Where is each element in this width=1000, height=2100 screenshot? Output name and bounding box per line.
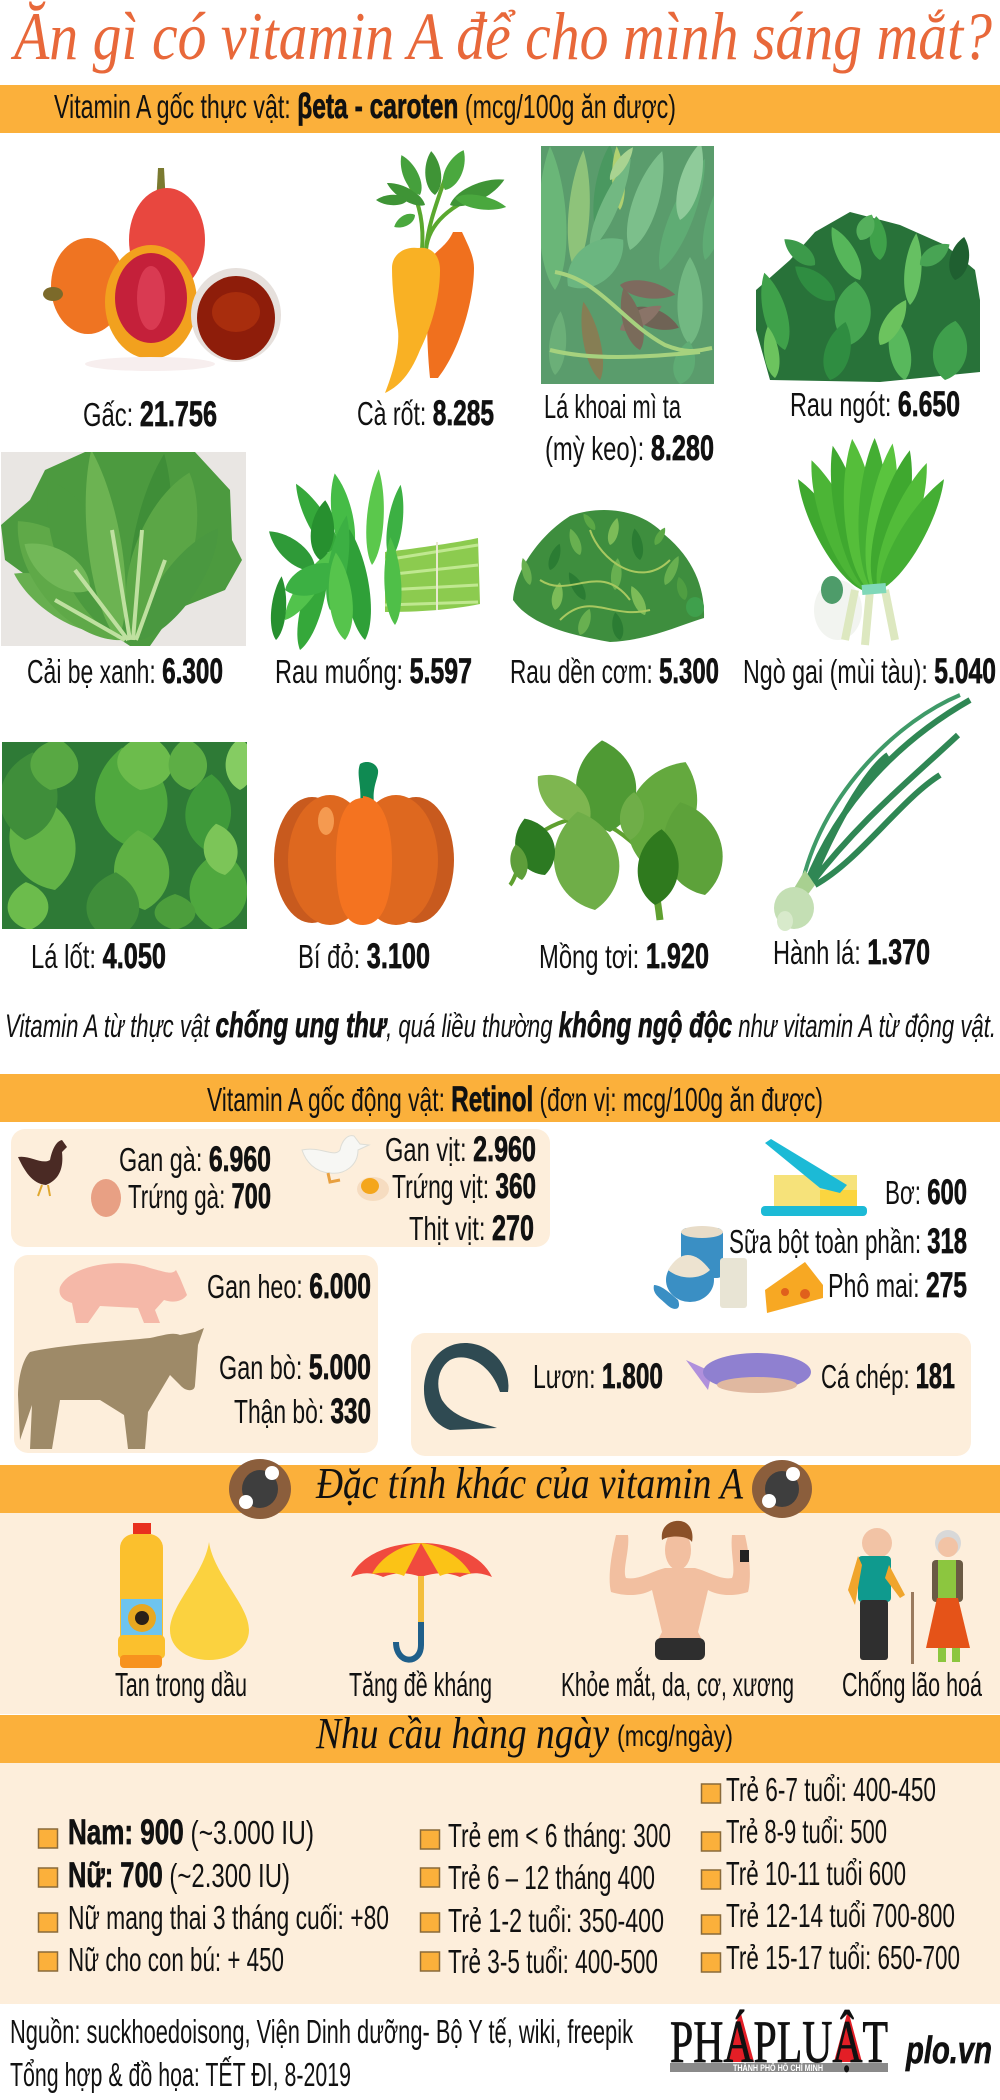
label: beef kidney: Thận bò: 330 <box>234 1392 371 1431</box>
icon: milk powder <box>654 1226 747 1309</box>
panel: daily needs background <box>0 1763 1000 2004</box>
icon: right eye <box>752 1460 812 1518</box>
label: immune: Tăng đề kháng <box>349 1666 492 1703</box>
panel: poultry <box>11 1129 550 1248</box>
icon: hen <box>18 1140 67 1196</box>
label: pig liver: Gan heo: 6.000 <box>207 1267 371 1306</box>
column: older children: Trẻ 8-9 tuổi: 500 <box>726 1813 887 1850</box>
column: infants and young children: Trẻ em < 6 tháng: 300 <box>448 1817 671 1854</box>
icon: carp <box>686 1353 811 1393</box>
label: malabar spinach: Mồng tơi: 1.920 <box>539 937 709 976</box>
icon: cow <box>18 1328 204 1449</box>
logo: Phap Luat: THÀNH PHỐ HỒ CHÍ MINH <box>733 2062 823 2073</box>
food: cassava leaves photo <box>541 146 714 384</box>
label: carp: Cá chép: 181 <box>821 1357 955 1396</box>
section band: other properties <box>0 1459 1000 1513</box>
label: cassava leaves: Lá khoai mì ta <box>544 388 681 425</box>
icon: oil bottle <box>118 1523 165 1668</box>
panel: pig and cow <box>14 1255 378 1453</box>
section band: daily needs: Nhu cầu hàng ngày <box>315 1709 609 1758</box>
label: chicken liver: Gan gà: 6.960 <box>119 1140 271 1179</box>
column: infants and young children: Trẻ 3-5 tuổi: 400-500 <box>448 1943 658 1980</box>
icon: pig <box>60 1263 187 1323</box>
label: beef liver: Gan bò: 5.000 <box>219 1348 371 1387</box>
label: carrot: Cà rốt: 8.285 <box>357 394 494 433</box>
icon: duck egg <box>357 1177 389 1201</box>
food: amaranth <box>513 510 704 642</box>
label: strong body: Khỏe mắt, da, cơ, xương <box>561 1666 794 1703</box>
label: cassava leaves <box>544 388 714 468</box>
label: chicken egg: Trứng gà: 700 <box>128 1177 271 1216</box>
label: duck egg: Trứng vịt: 360 <box>392 1167 536 1206</box>
food: betel leaves photo <box>2 742 247 929</box>
label: water spinach: Rau muống: 5.597 <box>275 652 472 691</box>
icon: chicken egg <box>91 1179 121 1217</box>
food: rau ngot <box>753 211 980 383</box>
food: mustard greens photo <box>0 448 246 661</box>
label: butter: Bơ: 600 <box>885 1173 967 1212</box>
column: adults: Nữ: 700 (~2.300 IU) <box>68 1856 290 1895</box>
label: duck liver: Gan vịt: 2.960 <box>385 1130 536 1169</box>
food: water spinach <box>262 469 480 653</box>
label: duck meat: Thịt vịt: 270 <box>409 1209 534 1248</box>
section band: plant vitamin A <box>0 85 1000 133</box>
column: adults: Nữ cho con bú: + 450 <box>68 1941 284 1978</box>
label: amaranth: Rau dền cơm: 5.300 <box>510 652 719 691</box>
label: spring onion: Hành lá: 1.370 <box>773 933 930 972</box>
column: infants and young children <box>420 1817 671 1980</box>
label: dissolves in oil: Tan trong dầu <box>115 1666 247 1703</box>
icon: left eye <box>229 1459 291 1519</box>
label: gac: Gấc: 21.756 <box>83 395 217 434</box>
food: carrots <box>376 147 508 393</box>
icon: eel <box>424 1343 508 1430</box>
section band: animal vitamin A <box>0 1074 1000 1122</box>
food: pumpkin <box>274 762 454 925</box>
icon: duck <box>302 1136 369 1182</box>
panel: fish <box>411 1333 971 1456</box>
section band: other properties: Đặc tính khác của vitamin A <box>315 1459 744 1508</box>
icon: butter <box>761 1139 867 1216</box>
source credits <box>10 2013 633 2093</box>
section band: daily needs: (mcg/ngày) <box>617 1720 733 1753</box>
column: infants and young children: Trẻ 1-2 tuổi: 350-400 <box>448 1902 664 1939</box>
label: cheese: Phô mai: 275 <box>828 1266 967 1305</box>
column: infants and young children: Trẻ 6 – 12 tháng 400 <box>448 1859 655 1896</box>
column: older children <box>702 1771 960 1976</box>
food: malabar spinach <box>506 738 733 920</box>
label: pumpkin: Bí đỏ: 3.100 <box>298 937 430 976</box>
food: spring onion <box>774 695 970 931</box>
icon: oil drop <box>170 1542 249 1660</box>
section band: daily needs <box>0 1709 1000 1763</box>
label: eel: Lươn: 1.800 <box>533 1357 663 1396</box>
label: mustard greens: Cải bẹ xanh: 6.300 <box>27 652 223 691</box>
logo: Phap Luat: PHÁPLUẬT <box>670 2009 888 2075</box>
food: gac fruit <box>43 168 281 371</box>
label: cassava leaves: (mỳ keo): 8.280 <box>545 429 714 468</box>
icon: muscular man <box>610 1521 750 1660</box>
column: adults <box>38 1813 389 1978</box>
icon: umbrella <box>351 1543 492 1660</box>
section band: animal vitamin A: Vitamin A gốc động vật: Retinol (đơn vị: mcg/100g ăn được) <box>207 1080 823 1119</box>
group: dairy <box>654 1139 967 1313</box>
column: adults: Nữ mang thai 3 tháng cuối: +80 <box>68 1899 389 1936</box>
panel: other properties background <box>0 1513 1000 1714</box>
label: betel leaves: Lá lốt: 4.050 <box>31 937 166 976</box>
section band: plant vitamin A: Vitamin A gốc thực vật: βeta - caroten (mcg/100g ăn được) <box>54 87 676 126</box>
label: rau ngot: Rau ngót: 6.650 <box>790 385 960 424</box>
source credits: Tổng hợp & đồ họa: TẾT ĐI, 8-2019 <box>10 2056 351 2093</box>
source credits: Nguồn: suckhoedoisong, Viện Dinh dưỡng- Bộ Y tế, wiki, freepik <box>10 2013 633 2050</box>
logo: Phap Luat <box>670 2009 888 2075</box>
food: culantro <box>787 437 954 645</box>
icon: cheese <box>765 1262 823 1313</box>
column: older children: Trẻ 10-11 tuổi 600 <box>726 1855 906 1892</box>
column: adults: Nam: 900 (~3.000 IU) <box>68 1813 314 1852</box>
icon: elderly couple <box>848 1528 970 1664</box>
